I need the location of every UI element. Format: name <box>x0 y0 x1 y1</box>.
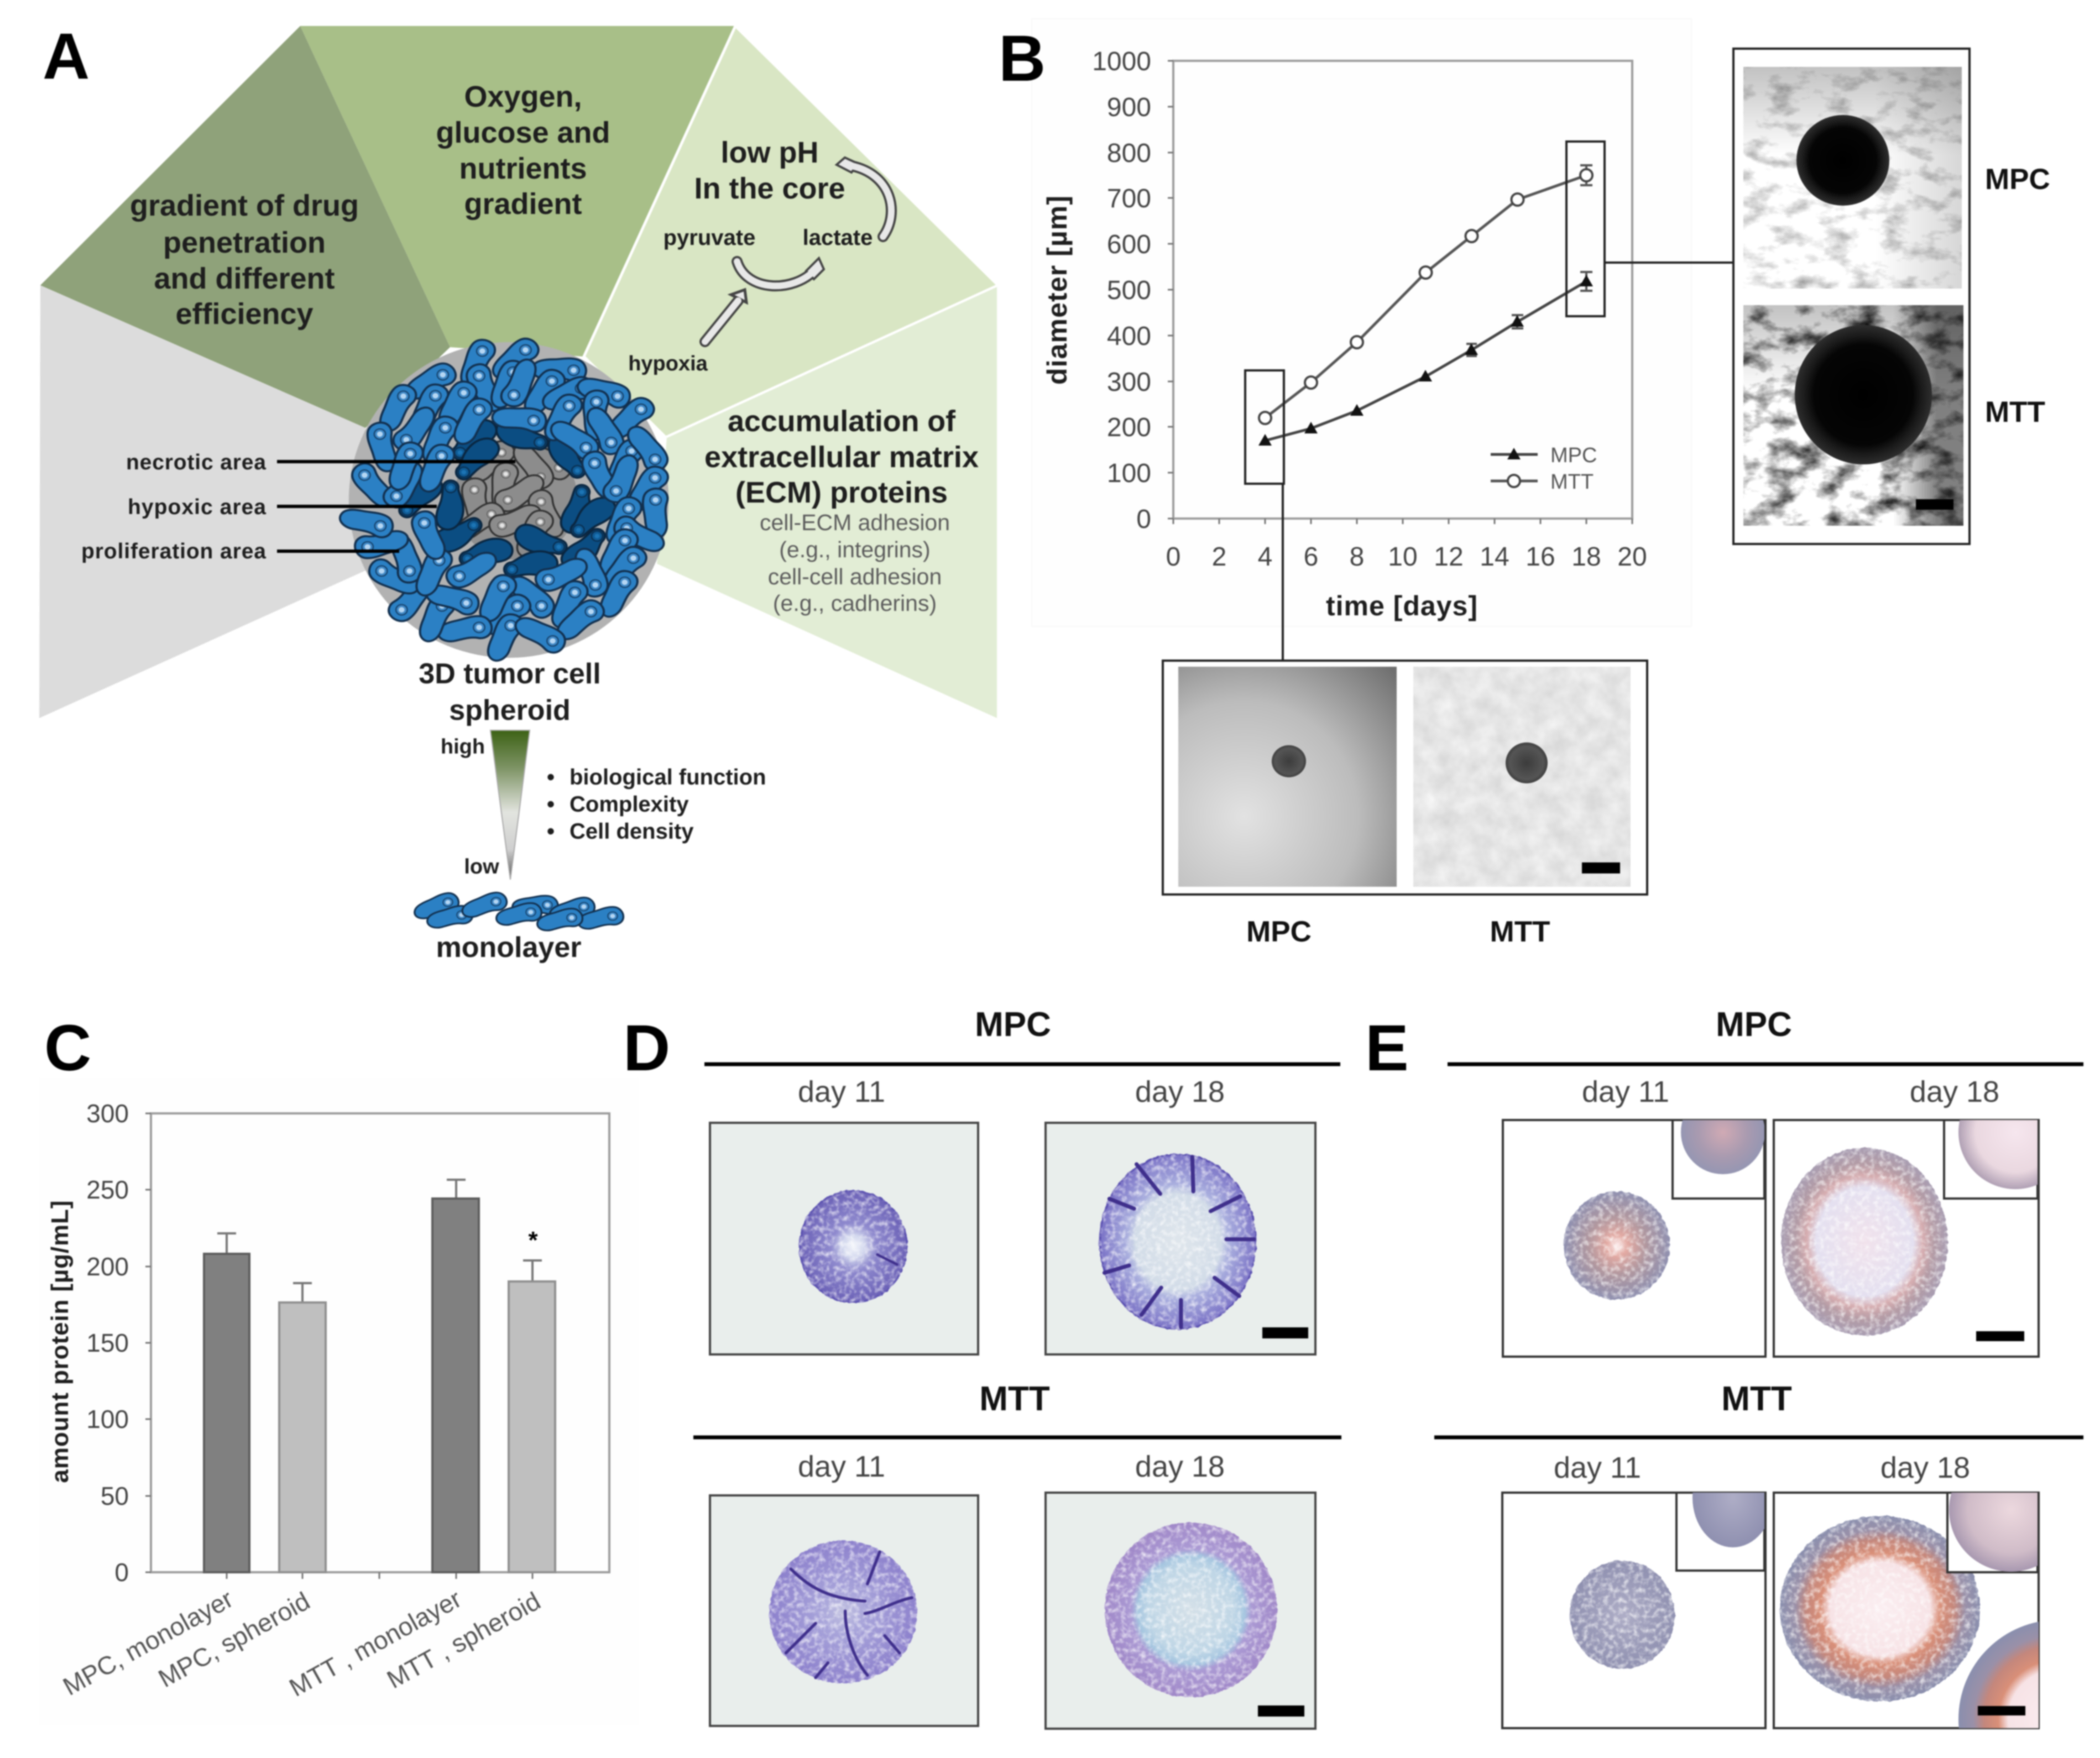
spheroid caption: spheroid <box>449 694 571 726</box>
wedge: low pH in the core: In the core <box>694 172 845 205</box>
legend: MTT <box>1550 470 1594 494</box>
section: MPC day 18 <box>1046 1123 1315 1354</box>
MPC heading: day 11 <box>798 1075 885 1108</box>
line chart: spheroid diameter vs time <box>1032 19 1691 626</box>
y axis labels: 150 <box>86 1328 129 1357</box>
y axis labels: 200 <box>86 1252 129 1281</box>
y axis title: amount protein [µg/mL] <box>46 1201 74 1483</box>
y axis labels: 0 <box>114 1558 129 1587</box>
panel label A: A <box>43 20 90 93</box>
y axis ticks: 200 <box>1107 413 1151 442</box>
y axis ticks: 600 <box>1107 230 1151 259</box>
MPC heading: day 18 <box>1135 1075 1225 1108</box>
x axis labels: MTT , spheroid <box>382 1586 545 1694</box>
MPC heading: day 18 <box>1910 1075 1999 1108</box>
panel label D: D <box>623 1012 670 1085</box>
wedge: accumulation of extracellular matrix: cell-cell adhesion <box>768 564 942 589</box>
x axis labels: MPC, monolayer <box>58 1584 238 1701</box>
y axis ticks: 1000 <box>1092 47 1151 76</box>
wedge: low pH in the core: hypoxia <box>628 352 708 375</box>
y axis ticks: 400 <box>1107 322 1151 351</box>
property list <box>547 765 766 844</box>
wedge: accumulation of extracellular matrix: extracellular matrix <box>704 441 979 474</box>
inset <box>1942 1119 2039 1201</box>
significance star: * <box>528 1227 538 1254</box>
section: MTT day 18 <box>1046 1493 1315 1729</box>
axis titles: diameter [µm] <box>1042 196 1073 385</box>
property list: • <box>547 819 555 844</box>
y axis labels <box>86 1099 129 1587</box>
panel label C: C <box>44 1012 91 1085</box>
x axis labels: 18 <box>1571 542 1601 572</box>
panel label B: B <box>999 22 1046 95</box>
wedge: accumulation of extracellular matrix: accumulation of <box>728 405 956 438</box>
x axis labels <box>58 1584 545 1702</box>
wedge: accumulation of extracellular matrix: cell-ECM adhesion <box>760 510 950 535</box>
MTT heading <box>693 1380 1341 1483</box>
section: MPC day 18 <box>1772 1118 2041 1359</box>
x axis labels: 20 <box>1617 542 1647 572</box>
property list: Cell density <box>570 819 694 844</box>
neighbouring spheroid <box>1957 1621 2040 1729</box>
x axis labels: 0 <box>1166 542 1180 572</box>
micrograph: MPC day 4 <box>1178 667 1397 887</box>
x axis labels: 6 <box>1304 542 1318 572</box>
arrow: hypoxia <box>705 290 746 342</box>
micrographs day 4: MTT <box>1490 915 1550 948</box>
section: MTT day 11 <box>710 1495 978 1726</box>
section: MTT day 18 <box>1772 1490 2041 1730</box>
micrographs day 18: MTT <box>1985 396 2045 428</box>
x axis labels: 14 <box>1480 542 1509 572</box>
highlight box day 4 <box>1245 370 1284 484</box>
wedge: drug penetration gradient: gradient of drug <box>130 189 359 222</box>
wedge: low pH in the core: lactate <box>803 226 873 250</box>
connector lines <box>1283 263 1733 661</box>
leader lines and area labels: proliferation area <box>81 540 266 563</box>
spheroid caption <box>419 658 601 726</box>
legend <box>1491 444 1597 494</box>
highlight box day 18 <box>1566 142 1605 316</box>
wedge: oxygen, glucose and nutrients gradient: gradient <box>464 187 582 221</box>
y axis ticks: 700 <box>1107 184 1151 213</box>
leader lines and area labels: hypoxic area <box>128 495 266 519</box>
MTT heading: day 18 <box>1135 1450 1225 1483</box>
section: MPC day 11 <box>710 1123 978 1354</box>
leader lines and area labels <box>81 451 515 563</box>
wedge: accumulation of extracellular matrix: (ECM) proteins <box>735 476 948 509</box>
MPC heading <box>704 1006 1340 1108</box>
wedge: oxygen, glucose and nutrients gradient: nutrients <box>459 152 587 185</box>
bars with error bars <box>204 1180 555 1572</box>
panel E: stained spheroid sections with insets <box>1365 1006 2100 1758</box>
wedge: oxygen, glucose and nutrients gradient <box>300 26 735 357</box>
MPC heading: MPC <box>1716 1006 1792 1044</box>
y axis ticks: 500 <box>1107 276 1151 305</box>
y axis labels: 250 <box>86 1175 129 1204</box>
micrographs day 4 <box>1163 661 1647 948</box>
y axis labels: 50 <box>101 1482 129 1510</box>
MTT heading: MTT <box>979 1380 1050 1418</box>
MPC heading: day 11 <box>1582 1075 1669 1108</box>
section: MPC day 11 <box>1503 1090 1765 1357</box>
panel C: protein amount bar chart <box>39 1012 639 1725</box>
wedge: gray proliferation zone background <box>39 285 365 718</box>
y axis ticks: 800 <box>1107 139 1151 168</box>
arrow: pyruvate to lactate <box>737 258 824 286</box>
section: MTT day 11 <box>1500 1490 1768 1730</box>
wedge: drug penetration gradient: and different <box>154 262 335 295</box>
x axis labels: 8 <box>1350 542 1364 572</box>
panel label E: E <box>1365 1012 1409 1085</box>
MTT heading: day 11 <box>798 1450 885 1483</box>
wedge: oxygen, glucose and nutrients gradient: Oxygen, <box>464 80 582 113</box>
hypoxic dark blue cells <box>390 414 620 579</box>
leader lines and area labels: necrotic area <box>126 451 266 474</box>
property list: biological function <box>570 765 766 789</box>
x axis labels: 16 <box>1526 542 1555 572</box>
x axis labels: 12 <box>1434 542 1464 572</box>
y axis ticks: 900 <box>1107 93 1151 122</box>
MTT heading: day 11 <box>1554 1451 1641 1484</box>
micrograph: MTT day 18 <box>1743 305 1963 526</box>
panel B: diameter growth chart and micrographs <box>999 19 2050 948</box>
wedge: drug penetration gradient: efficiency <box>175 297 314 331</box>
y axis labels: 300 <box>86 1099 129 1128</box>
gradient triangle high to low <box>441 730 530 880</box>
spheroid illustration <box>337 334 676 665</box>
x axis labels: 2 <box>1212 542 1226 572</box>
monolayer cells <box>412 891 623 930</box>
MPC heading: MPC <box>975 1006 1051 1044</box>
wedge: accumulation of extracellular matrix: (e.g., cadherins) <box>773 590 937 616</box>
series MPC <box>1258 272 1593 446</box>
wedge: low pH in the core <box>584 26 998 437</box>
x axis labels: 4 <box>1258 542 1272 572</box>
gradient triangle high to low: low <box>464 855 499 878</box>
inset <box>1670 1119 1765 1201</box>
MPC heading <box>1448 1006 2083 1108</box>
wedge: drug penetration gradient <box>40 26 450 428</box>
property list: Complexity <box>570 792 689 817</box>
y axis labels: 100 <box>86 1405 129 1433</box>
micrographs day 18 <box>1733 49 2050 544</box>
MTT heading: day 18 <box>1880 1451 1970 1484</box>
MTT heading: MTT <box>1721 1380 1792 1418</box>
micrograph: MPC day 18 <box>1743 67 1962 289</box>
wedge: drug penetration gradient: penetration <box>163 226 326 259</box>
proliferating blue cells <box>337 334 676 665</box>
panel A: spheroid microenvironment diagram <box>39 20 998 964</box>
x axis labels <box>1166 542 1647 572</box>
wedge: low pH in the core: low pH <box>721 136 818 169</box>
wedge: accumulation of extracellular matrix: (e.g., integrins) <box>779 537 931 562</box>
y axis ticks: 0 <box>1136 505 1151 534</box>
MTT heading <box>1434 1380 2083 1484</box>
legend: MPC <box>1550 444 1597 467</box>
gradient triangle high to low: high <box>441 735 485 758</box>
spheroid caption: 3D tumor cell <box>419 658 601 690</box>
wedge: oxygen, glucose and nutrients gradient: glucose and <box>436 116 610 149</box>
series MTT <box>1259 165 1592 424</box>
arrow: lactate to low pH <box>837 158 891 237</box>
inset <box>1945 1492 2039 1574</box>
property list: • <box>547 765 555 789</box>
wedge: accumulation of extracellular matrix <box>656 285 998 720</box>
line chart: spheroid diameter vs time: time [days] <box>1326 590 1477 621</box>
x axis labels: 10 <box>1388 542 1418 572</box>
y axis ticks <box>1092 47 1632 534</box>
x axis labels: MPC, spheroid <box>154 1586 315 1693</box>
wedge: low pH in the core: pyruvate <box>664 226 755 250</box>
y axis ticks: 100 <box>1107 459 1151 488</box>
micrographs day 4: MPC <box>1246 915 1312 948</box>
micrograph: MTT day 4 <box>1413 667 1631 887</box>
x axis labels: MTT , monolayer <box>284 1584 466 1702</box>
property list: • <box>547 792 555 817</box>
y axis ticks: 300 <box>1107 368 1151 397</box>
necrotic gray cells <box>449 433 577 560</box>
inset <box>1674 1492 1765 1573</box>
micrographs day 18: MPC <box>1985 163 2050 196</box>
monolayer caption: monolayer <box>436 932 581 964</box>
panel D: stained spheroid sections <box>623 1006 1341 1729</box>
